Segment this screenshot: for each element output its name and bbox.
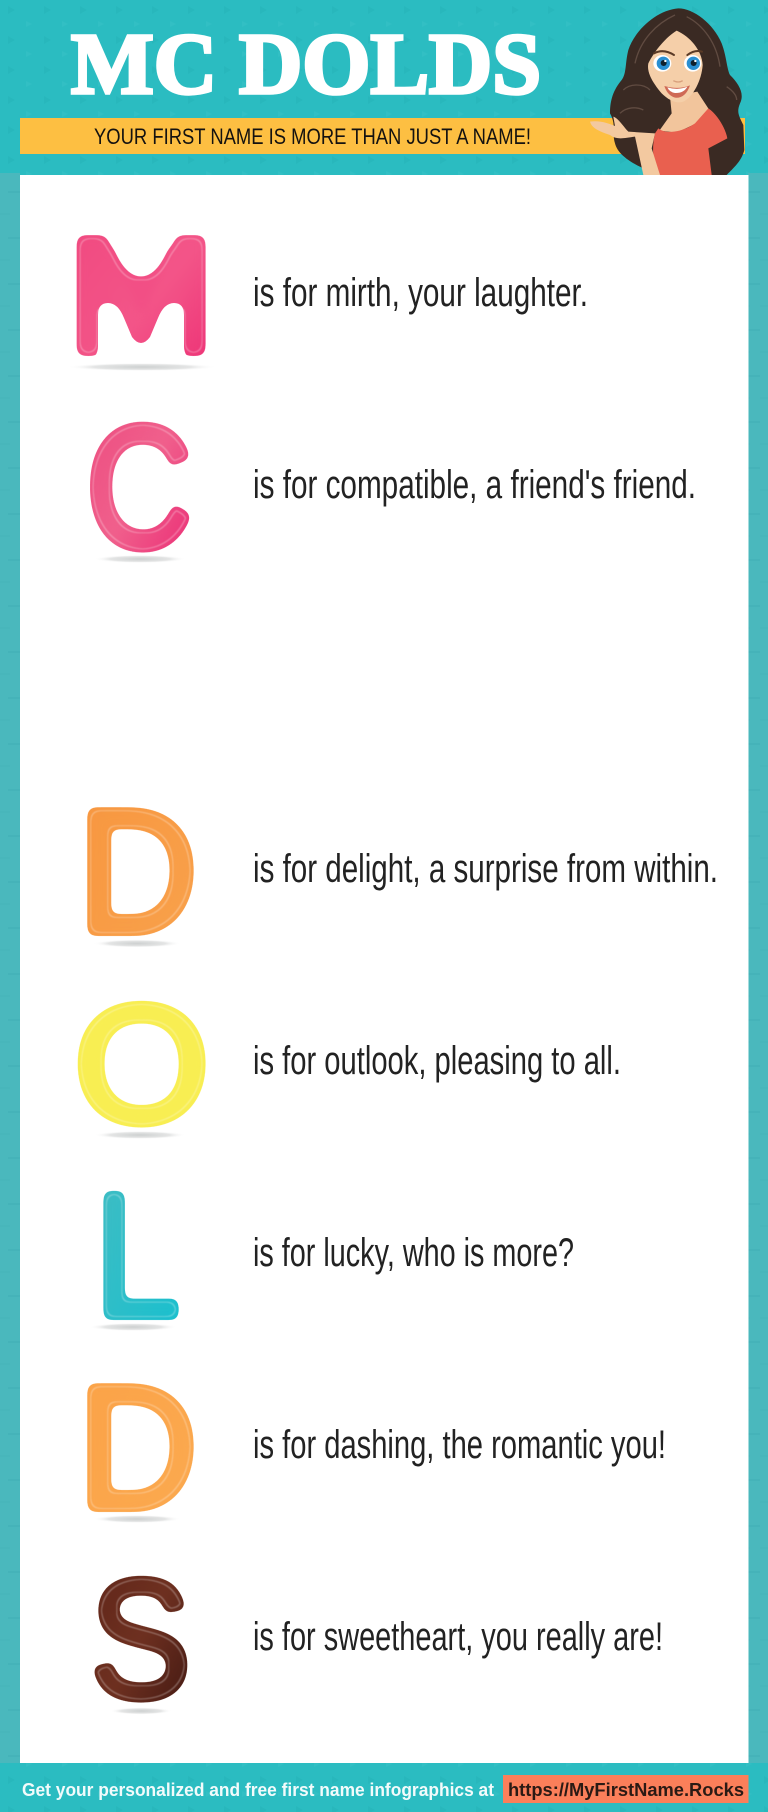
icon: letter D: D bbox=[78, 1350, 197, 1544]
icon: letter L: L bbox=[94, 1158, 180, 1354]
row: L bbox=[89, 1158, 574, 1354]
subtitle banner bbox=[20, 118, 745, 154]
text: M line: is for mirth, your laughter. bbox=[253, 271, 588, 315]
letter shadow D bbox=[93, 940, 181, 948]
row: S bbox=[90, 1545, 663, 1733]
letter shadow C bbox=[94, 555, 186, 563]
title: MC DOLDS bbox=[71, 15, 541, 112]
letter shadow D bbox=[93, 1515, 181, 1523]
footer call to action: Get your personalized and free first name infographics at bbox=[22, 1779, 494, 1800]
row: O bbox=[75, 971, 621, 1156]
row: C bbox=[87, 391, 696, 583]
letter shadow L bbox=[89, 1323, 177, 1331]
row: D dashing bbox=[78, 1350, 666, 1544]
row: M bbox=[66, 204, 588, 387]
icon: letter O: O bbox=[75, 971, 209, 1156]
icon: cartoon woman bbox=[590, 8, 744, 175]
row: D delight bbox=[78, 774, 718, 968]
icon: letter S: S bbox=[90, 1545, 191, 1733]
footer bbox=[22, 1775, 748, 1803]
letter shadow S bbox=[110, 1708, 172, 1714]
letter shadow M bbox=[67, 363, 217, 371]
footer URL badge: https://MyFirstName.Rocks bbox=[508, 1779, 744, 1800]
text: O line: is for outlook, pleasing to all. bbox=[253, 1039, 621, 1083]
icon: letter M: M bbox=[66, 204, 216, 387]
text: L line: is for lucky, who is more? bbox=[253, 1231, 574, 1275]
icon: letter C: C bbox=[87, 391, 192, 583]
subtitle banner: YOUR FIRST NAME IS MORE THAN JUST A NAME! bbox=[94, 124, 531, 149]
icon: letter D: D bbox=[78, 774, 197, 968]
letter shadow O bbox=[94, 1131, 186, 1139]
